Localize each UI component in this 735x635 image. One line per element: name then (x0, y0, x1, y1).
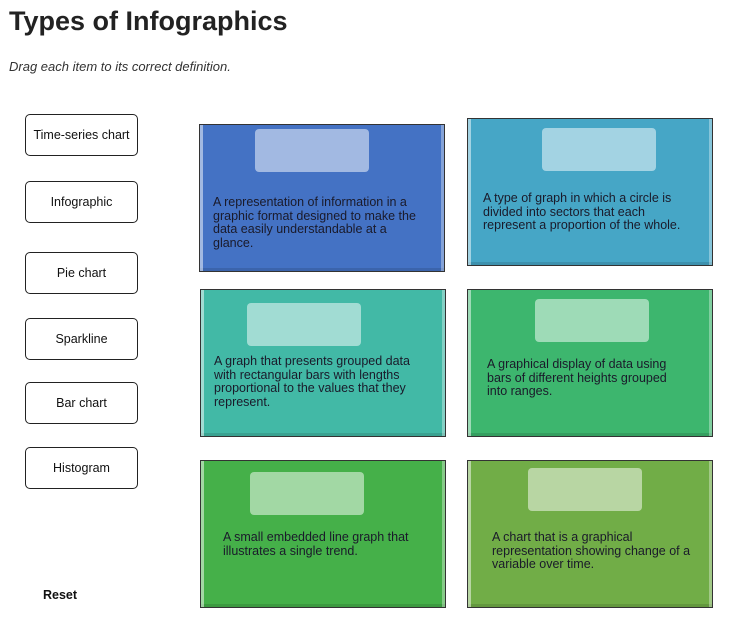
card: pie chart definition (467, 118, 713, 266)
button: Histogram: Histogram (53, 461, 110, 475)
button: Infographic (25, 181, 138, 223)
card: bar chart definition: A graph that presents grouped data with rectangular bars with lengths proportional to the values that they represent. (214, 354, 410, 408)
card: histogram definition (467, 289, 713, 437)
button: Histogram (25, 447, 138, 489)
button: Sparkline (25, 318, 138, 360)
subtitle: Drag each item to its correct definition. (9, 59, 231, 74)
reset: Reset (43, 588, 77, 602)
button: Sparkline: Sparkline (55, 332, 108, 346)
button: Time-series chart: Time-series chart (33, 128, 130, 142)
title: Types of Infographics (9, 6, 288, 36)
card: time-series definition (467, 460, 713, 608)
button: Infographic: Infographic (51, 195, 112, 209)
button: Bar chart: Bar chart (56, 396, 107, 410)
card: pie chart definition: A type of graph in which a circle is divided into sectors that each represent a proportion of the whole. (483, 191, 680, 232)
card: infographic definition (199, 124, 445, 272)
card: sparkline definition (200, 460, 446, 608)
button: Time-series chart (25, 114, 138, 156)
button: Bar chart (25, 382, 138, 424)
card: bar chart definition (200, 289, 446, 437)
card: histogram definition: A graphical display of data using bars of different heights grouped into ranges. (487, 357, 667, 398)
button: Pie chart (25, 252, 138, 294)
card: sparkline definition: A small embedded line graph that illustrates a single trend. (223, 530, 409, 558)
card: infographic definition: A representation of information in a graphic format designed to make the data easily understandable at a glance. (213, 195, 416, 250)
button: Pie chart: Pie chart (57, 266, 106, 280)
card: time-series definition: A chart that is a graphical representation showing change of a variable over time. (492, 530, 690, 571)
